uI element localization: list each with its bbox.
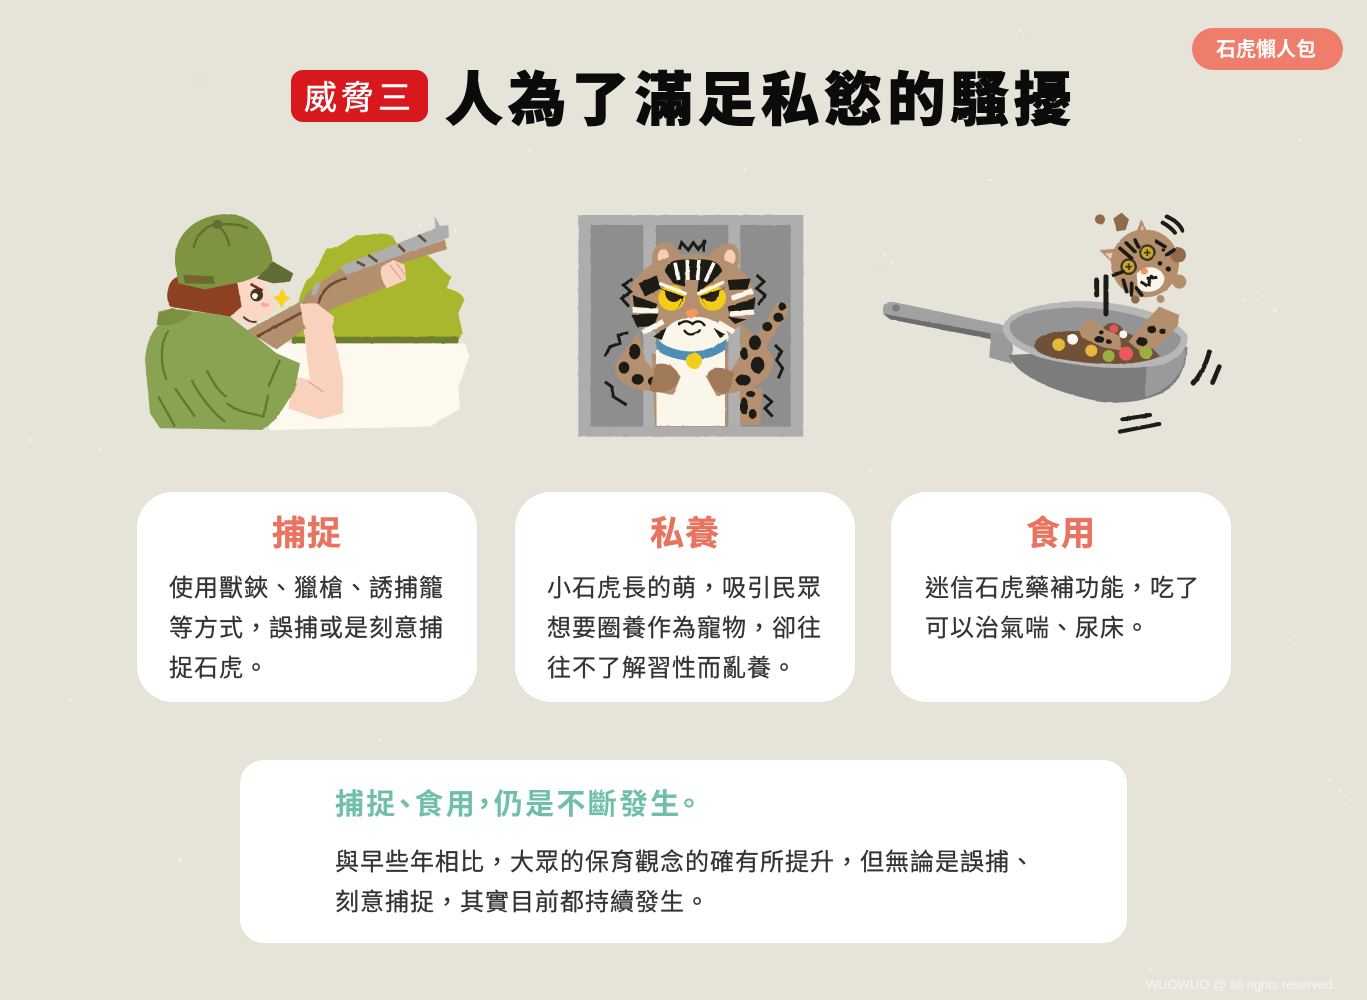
illustration: hunter aiming a rifle bbox=[145, 214, 469, 430]
title: 人為了滿足私慾的騷擾 bbox=[445, 68, 1077, 133]
illustration: leopard cat in a frying pan bbox=[883, 213, 1219, 432]
private keeping description: 小石虎長的萌，吸引民眾 bbox=[547, 575, 822, 602]
panel: capture bbox=[137, 492, 477, 702]
conclusion text bbox=[335, 849, 1035, 916]
private keeping description: 往不了解習性而亂養。 bbox=[547, 655, 797, 682]
private keeping description: 想要圈養作為寵物，卻往 bbox=[547, 615, 822, 642]
panel: eating bbox=[891, 492, 1231, 702]
copyright footer: WUOWUO @ all rights reserved. bbox=[1146, 977, 1336, 992]
panel heading: eating: 食用 bbox=[1026, 515, 1096, 553]
tag: series label bbox=[1192, 28, 1343, 70]
private keeping description bbox=[547, 575, 822, 682]
eating description bbox=[925, 575, 1200, 642]
capture description: 等方式，誤捕或是刻意捕 bbox=[169, 615, 444, 642]
capture description: 捉石虎。 bbox=[169, 655, 269, 682]
panel: conclusion bbox=[240, 760, 1127, 943]
panel heading: capture: 捕捉 bbox=[272, 515, 342, 553]
capture description: 使用獸鋏、獵槍、誘捕籠 bbox=[169, 575, 444, 602]
panel: private keeping bbox=[515, 492, 855, 702]
conclusion heading: 捕捉、食用，仍是不斷發生。 bbox=[335, 789, 698, 821]
eating description: 迷信石虎藥補功能，吃了 bbox=[925, 575, 1200, 602]
badge: threat three: 威脅三 bbox=[304, 79, 415, 116]
conclusion text: 與早些年相比，大眾的保育觀念的確有所提升，但無論是誤捕、 bbox=[335, 849, 1035, 876]
illustration: caged leopard cat bbox=[578, 215, 803, 437]
badge: threat three bbox=[291, 70, 428, 122]
conclusion text: 刻意捕捉，其實目前都持續發生。 bbox=[335, 889, 710, 916]
tag: series label: 石虎懶人包 bbox=[1216, 39, 1316, 61]
eating description: 可以治氣喘、尿床。 bbox=[925, 615, 1150, 642]
panel heading: private keeping: 私養 bbox=[650, 515, 720, 553]
capture description bbox=[169, 575, 444, 682]
